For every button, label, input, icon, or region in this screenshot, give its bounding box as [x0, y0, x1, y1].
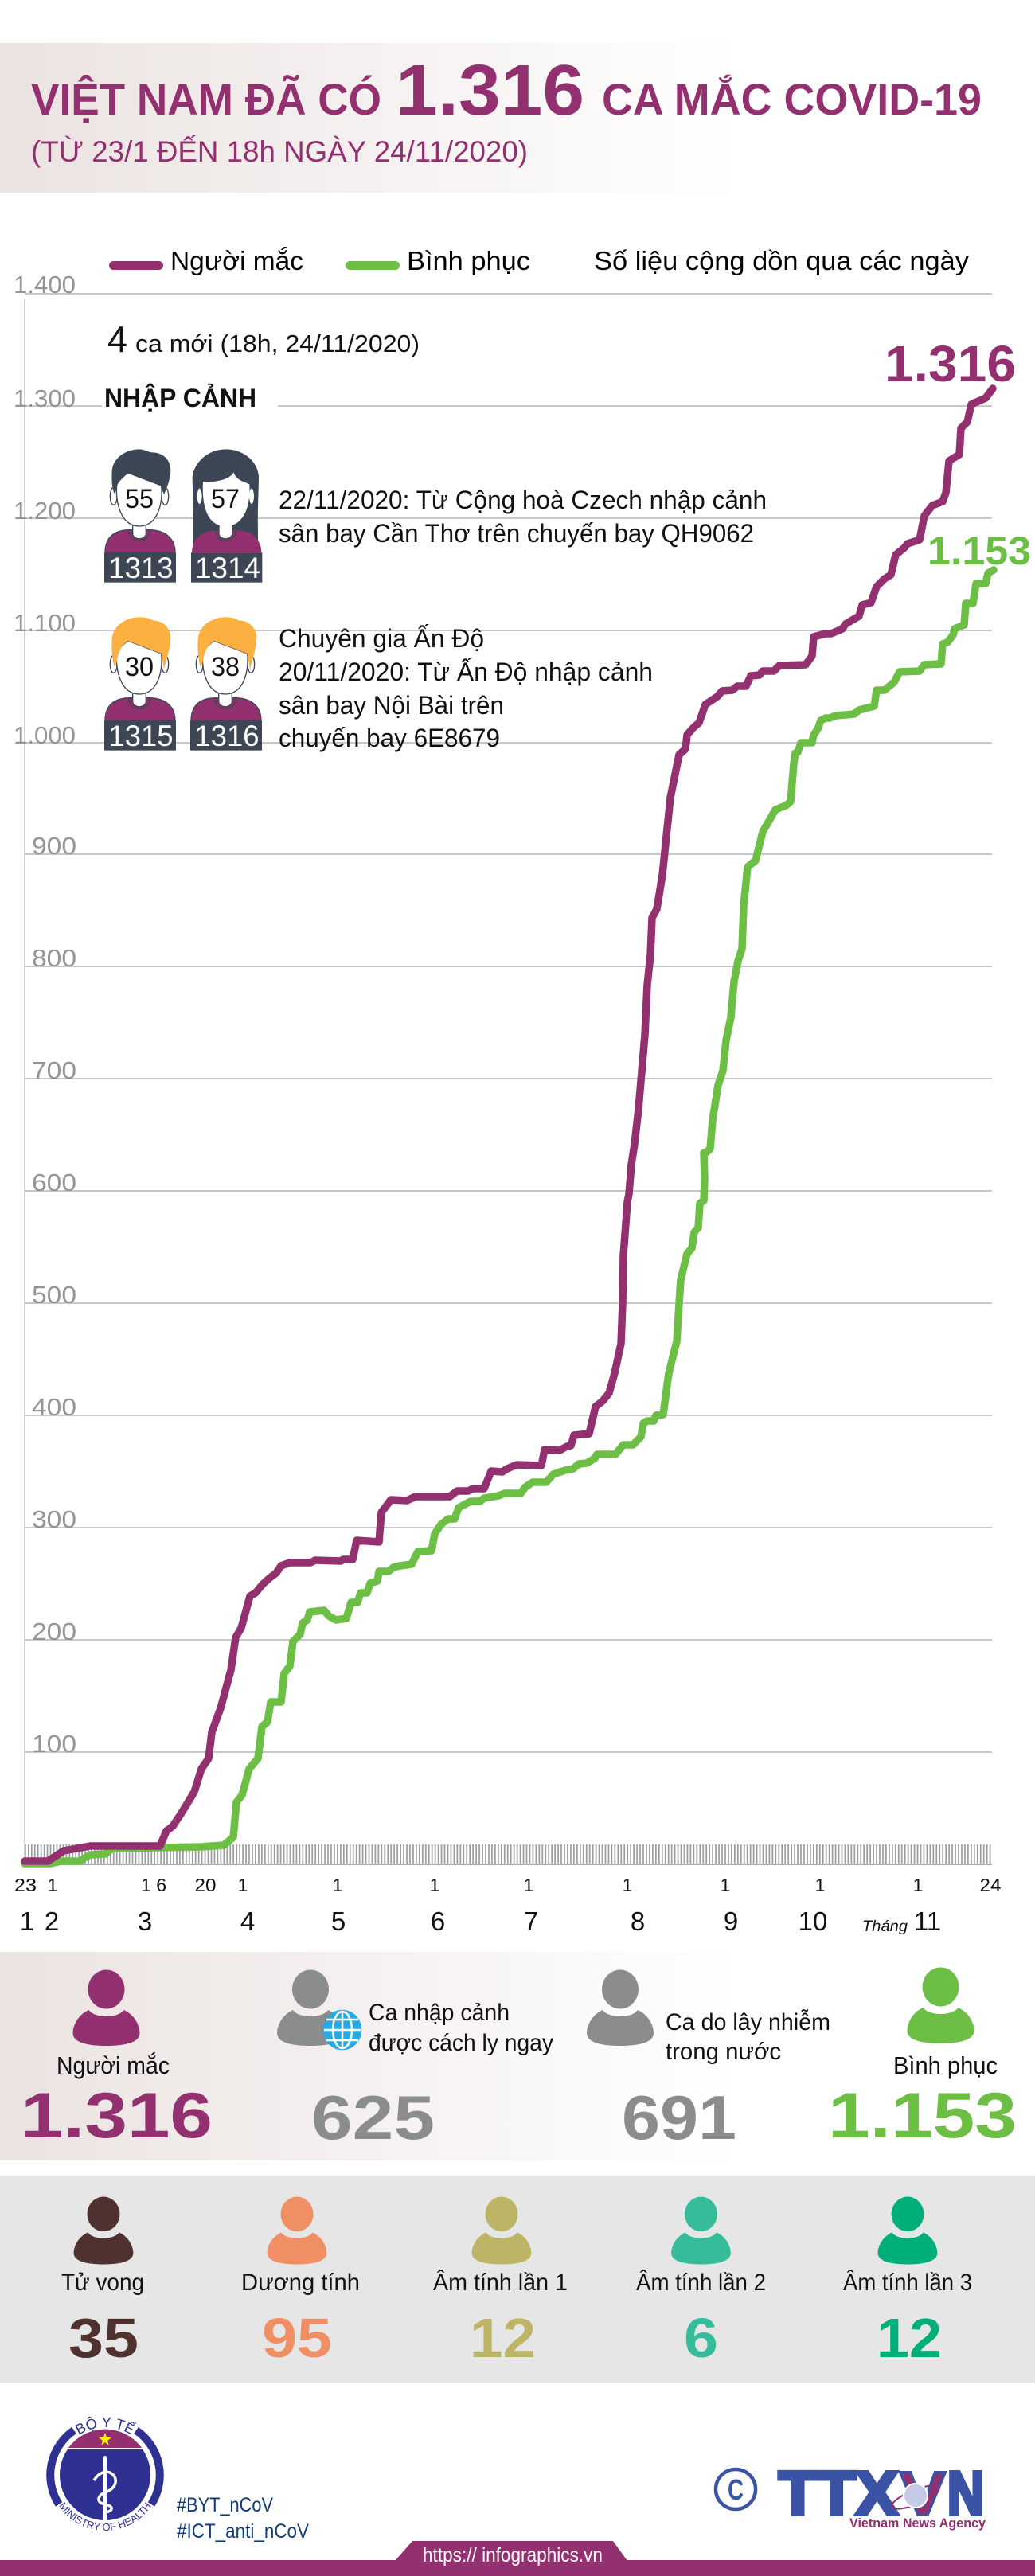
x axis month labels: 7 — [524, 1907, 538, 1936]
x axis month labels: 10 — [799, 1907, 827, 1936]
x axis day labels: 20 — [194, 1875, 217, 1895]
y axis labels: 1.200 — [14, 497, 76, 525]
title: VIỆT NAM ĐÃ CÓ — [31, 74, 381, 124]
copyright mark: C — [728, 2473, 744, 2506]
text: Czech arrivals: sân bay Cần Thơ trên chuyến bay QH9062 — [279, 519, 754, 548]
icon: male patient 1316: 38 — [211, 652, 240, 682]
icon: female patient 1314: 57 — [211, 484, 240, 514]
y axis labels: 400 — [32, 1393, 76, 1421]
text: India arrivals: 20/11/2020: Từ Ấn Độ nhập cảnh — [279, 658, 653, 686]
x axis day labels — [14, 1875, 1002, 1895]
x axis month labels: 4 — [240, 1907, 255, 1936]
hashtags: #ICT_anti_nCoV — [177, 2520, 309, 2543]
logo: Ministry of Health: BỘ Y TẾ — [75, 2417, 137, 2434]
status: positive — [241, 2197, 360, 2369]
text: India arrivals: Chuyên gia Ấn Độ — [279, 624, 484, 653]
stat: domestic cases: trong nước — [666, 2039, 781, 2065]
logo: TTXVN — [716, 2460, 986, 2531]
stat: imported cases: 625 — [311, 2082, 435, 2153]
status: negative twice: 6 — [684, 2307, 718, 2369]
icon: female patient 1314: 1314 — [195, 552, 260, 584]
status: deaths — [61, 2197, 144, 2369]
y axis labels: 600 — [32, 1169, 76, 1196]
end value: cases: 1.316 — [885, 335, 1016, 392]
x axis day labels: 16 — [141, 1875, 166, 1895]
icon: male patient 1315: 1315 — [108, 720, 174, 752]
status: negative three times: 12 — [877, 2307, 942, 2369]
x axis day labels: 1 — [238, 1875, 248, 1895]
x axis day labels: 1 — [333, 1875, 342, 1895]
stat: cases: 1.316 — [21, 2080, 213, 2152]
stat: domestic cases: Ca do lây nhiễm — [666, 2009, 830, 2035]
text: India arrivals: chuyến bay 6E8679 — [279, 724, 500, 752]
y axis labels: 100 — [32, 1730, 76, 1758]
status: deaths: Tử vong — [61, 2270, 144, 2296]
x axis month labels: 1 — [20, 1907, 34, 1936]
new cases note: 4 — [107, 318, 127, 360]
stat: imported cases: được cách ly ngay — [369, 2030, 553, 2056]
title: (TỪ 23/1 ĐẾN 18h NGÀY 24/11/2020) — [31, 135, 528, 168]
text: India arrivals: sân bay Nội Bài trên — [279, 691, 504, 720]
icon: male patient 1315: 30 — [125, 652, 154, 682]
text: Czech arrivals — [279, 486, 767, 548]
status: negative three times — [843, 2197, 972, 2369]
month caption: Tháng — [862, 1918, 908, 1935]
title: 1.316 — [396, 51, 584, 131]
x axis day labels: 1 — [721, 1875, 730, 1895]
y axis labels: 800 — [32, 944, 76, 972]
copyright mark — [716, 2469, 756, 2509]
panel: patient status — [0, 2176, 1035, 2383]
logo: Ministry of Health: MINISTRY OF HEALTH — [59, 2502, 151, 2531]
x axis month labels: 11 — [914, 1907, 941, 1936]
wordmark: TTX — [779, 2460, 898, 2528]
panel: totals — [0, 1952, 1035, 2160]
x axis month labels: 5 — [331, 1907, 346, 1936]
icon: globe — [324, 2011, 361, 2049]
y axis labels: 200 — [32, 1618, 76, 1645]
new cases note: NHẬP CẢNH — [104, 384, 256, 412]
url: https:// infographics.vn — [423, 2544, 603, 2566]
status: positive: Dương tính — [241, 2270, 360, 2296]
stat: recovered — [828, 1968, 1017, 2152]
patient group: India arrivals — [104, 617, 653, 752]
status: negative twice: Âm tính lần 2 — [636, 2270, 766, 2296]
icon: male patient 1313: 1313 — [108, 552, 174, 584]
x axis month labels — [20, 1907, 941, 1936]
status: negative three times: Âm tính lần 3 — [843, 2270, 972, 2296]
icon: male patient 1313: 55 — [125, 484, 154, 514]
status: negative twice — [636, 2197, 766, 2369]
text: Czech arrivals: 22/11/2020: Từ Cộng hoà Czech nhập cảnh — [279, 486, 767, 514]
stat: recovered: Bình phục — [893, 2051, 998, 2079]
x axis day labels: 1 — [623, 1875, 632, 1895]
x axis day labels: 23 — [14, 1875, 37, 1895]
y axis labels: 900 — [32, 832, 76, 860]
new cases note — [104, 318, 420, 412]
status: positive: 95 — [262, 2307, 332, 2369]
x axis day labels: 1 — [913, 1875, 923, 1895]
x axis day labels: 1 — [524, 1875, 533, 1895]
stat: cases — [21, 1969, 213, 2152]
title: CA MẮC COVID-19 — [602, 74, 982, 124]
patient group: Czech arrivals — [104, 449, 767, 584]
icon: male patient 1313 — [104, 449, 176, 584]
status: negative once: Âm tính lần 1 — [433, 2270, 568, 2296]
stat: imported cases: Ca nhập cảnh — [369, 2000, 510, 2026]
agency name: Vietnam News Agency — [849, 2516, 986, 2531]
x axis month labels: 6 — [431, 1907, 445, 1936]
x axis month labels: 3 — [138, 1907, 152, 1936]
legend: Người mắc — [170, 246, 303, 275]
wordmark: V — [900, 2460, 946, 2528]
footer bar — [0, 2541, 1035, 2576]
x axis day labels: 1 — [815, 1875, 825, 1895]
text: India arrivals — [279, 624, 653, 752]
title — [31, 51, 982, 168]
y axis labels: 300 — [32, 1505, 76, 1533]
y axis labels — [14, 271, 76, 1758]
grid lines and axis — [25, 294, 992, 1864]
icon: male patient 1315 — [104, 617, 176, 752]
new cases note: ca mới (18h, 24/11/2020) — [135, 330, 420, 357]
logo: Ministry of Health — [46, 2417, 164, 2531]
icon: male patient 1316 — [190, 617, 262, 752]
x axis month labels: 9 — [724, 1907, 738, 1936]
line chart: cumulative cases — [14, 271, 1031, 1936]
x axis month labels: 2 — [45, 1907, 59, 1936]
stat: cases: Người mắc — [57, 2051, 170, 2079]
x axis day labels: 1 — [48, 1875, 57, 1895]
hashtags: #BYT_nCoV — [177, 2494, 273, 2516]
wordmark — [779, 2460, 984, 2528]
hashtags — [177, 2494, 309, 2543]
header banner — [0, 43, 1035, 193]
day tick comb — [25, 1855, 992, 1864]
recovered line — [25, 570, 994, 1864]
cases line — [25, 388, 993, 1861]
status: negative once: 12 — [470, 2307, 536, 2369]
legend — [109, 246, 970, 275]
stat: recovered: 1.153 — [828, 2080, 1017, 2152]
x axis day labels: 1 — [430, 1875, 439, 1895]
x axis day labels: 24 — [979, 1875, 1002, 1895]
y axis labels: 1.300 — [14, 384, 76, 412]
stat: domestic cases: 691 — [622, 2082, 736, 2153]
y axis labels: 1.000 — [14, 721, 76, 749]
end value: recovered: 1.153 — [928, 529, 1031, 573]
stat: imported cases — [277, 1969, 553, 2153]
icon: male patient 1316: 1316 — [194, 720, 260, 752]
stat: domestic cases — [587, 1969, 830, 2153]
icon: female patient 1314 — [191, 449, 262, 584]
legend: Bình phục — [407, 246, 530, 275]
y axis labels: 700 — [32, 1056, 76, 1084]
legend: Số liệu cộng dồn qua các ngày — [594, 246, 970, 275]
y axis labels: 1.400 — [14, 271, 76, 299]
y axis labels: 500 — [32, 1281, 76, 1309]
status: negative once — [433, 2197, 568, 2369]
y axis labels: 1.100 — [14, 609, 76, 637]
x axis month labels: 8 — [631, 1907, 645, 1936]
wordmark: N — [947, 2460, 984, 2528]
status: deaths: 35 — [68, 2307, 139, 2369]
